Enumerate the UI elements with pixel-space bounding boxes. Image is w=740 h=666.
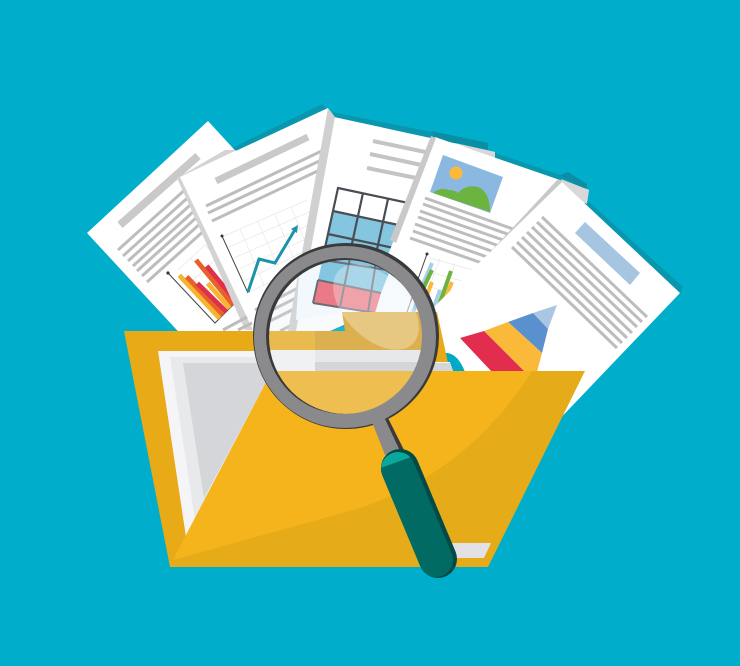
document 2: chart sheet	[177, 108, 420, 370]
pyramid chart	[460, 305, 557, 372]
line chart	[220, 200, 313, 293]
bar chart	[166, 245, 245, 323]
folder front	[170, 371, 585, 567]
lens ring	[253, 243, 439, 429]
document 3: table sheet	[288, 108, 495, 340]
edge shadow	[288, 108, 335, 331]
handle connector	[372, 418, 402, 455]
edge shadow	[177, 150, 253, 330]
text lines	[512, 217, 647, 348]
title bar	[120, 156, 198, 225]
handle	[398, 468, 438, 560]
document 5: front right sheet	[400, 179, 680, 450]
illustration: folder with documents under magnifying glass	[87, 104, 683, 578]
blue title bar	[575, 222, 640, 285]
text lines	[118, 178, 227, 282]
folder back	[124, 312, 488, 567]
title bar	[216, 137, 308, 181]
table	[313, 188, 413, 319]
magnifying glass	[253, 243, 439, 560]
lens view	[269, 260, 422, 414]
document 4: picture sheet	[370, 136, 589, 320]
bar chart	[407, 252, 473, 312]
text lines	[206, 147, 330, 331]
document 1: far left sheet	[87, 121, 345, 382]
folder inner pages	[158, 351, 453, 537]
sheet shadows	[232, 104, 683, 294]
small background gap	[328, 324, 346, 332]
edge shadow	[390, 136, 436, 243]
teal shape behind folder	[440, 353, 465, 372]
text lines	[367, 141, 430, 179]
picture	[430, 155, 503, 213]
text lines	[410, 198, 513, 263]
folder label	[452, 543, 491, 558]
